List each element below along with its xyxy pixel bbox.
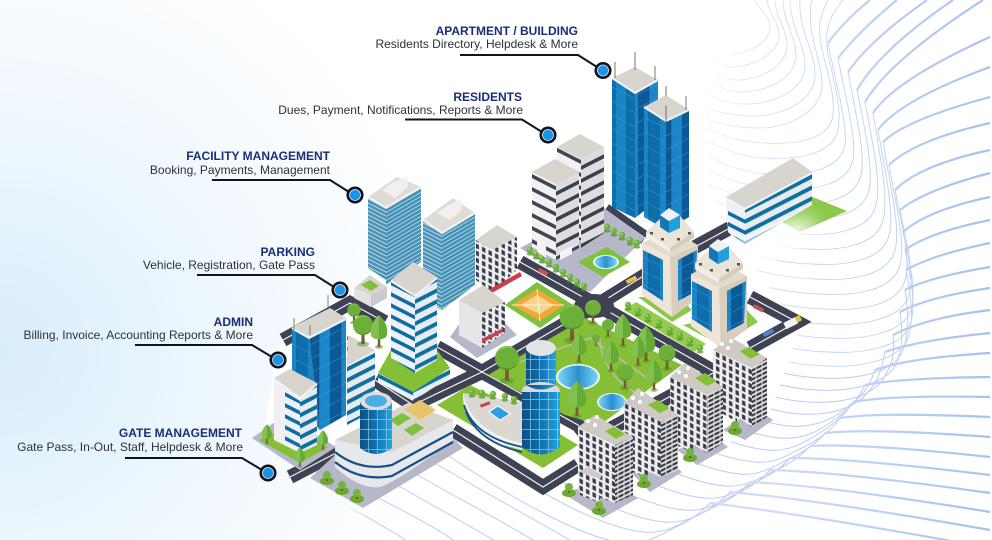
- residential block 1: [562, 415, 638, 518]
- callout: residents: RESIDENTS: [453, 90, 522, 104]
- hedge strip: [624, 302, 706, 354]
- park trees: [495, 300, 676, 418]
- callout: apartment / building: Residents Directory, Helpdesk & More: [375, 37, 578, 51]
- low-rise office building: [310, 400, 463, 508]
- callout: gate management: [17, 426, 275, 480]
- striped tower on podium: [378, 262, 450, 401]
- residential block 4: [713, 337, 773, 440]
- white slab rear: [557, 134, 604, 248]
- lower thin wave lines: [335, 290, 908, 540]
- aqua tower right: [423, 198, 475, 310]
- top vertical wave lines: [702, 0, 913, 366]
- back right slab building: [726, 158, 847, 248]
- thick right portions of waves: [710, 0, 990, 540]
- sports court: [505, 282, 573, 328]
- art deco tower rear plate: [638, 297, 692, 322]
- callout: gate management: GATE MANAGEMENT: [119, 426, 243, 440]
- art deco tower front: [691, 239, 747, 348]
- road network: [283, 210, 797, 487]
- soft fade over slab base: [715, 209, 821, 281]
- central park lawn: [488, 318, 682, 425]
- street trees left: [347, 303, 387, 349]
- art deco tower plate: [683, 308, 758, 345]
- white slab front: [532, 159, 579, 260]
- small white window block: [476, 225, 522, 294]
- cylindrical tower small: [360, 392, 392, 454]
- callout: admin: [24, 315, 285, 367]
- small green roof block: [354, 275, 387, 307]
- city white ground: [262, 130, 800, 518]
- fountain plaza: [520, 205, 645, 292]
- callout: parking: Vehicle, Registration, Gate Pass: [143, 258, 315, 272]
- callout: apartment / building: APARTMENT / BUILDING: [436, 24, 578, 38]
- aqua tower left: [368, 177, 421, 285]
- front lawn: [437, 385, 578, 468]
- art deco tower rear: [642, 208, 698, 317]
- blue glass tower: [292, 295, 346, 430]
- callout: facility management: [150, 149, 362, 202]
- residential block 3: [670, 363, 728, 465]
- vehicles: [538, 268, 802, 337]
- callout: residents: Dues, Payment, Notifications, Reports & More: [278, 103, 523, 117]
- callout: facility management: Booking, Payments, Management: [150, 163, 331, 177]
- callout: residents: [278, 90, 555, 142]
- residential block 2: [624, 388, 682, 492]
- callout: facility management: FACILITY MANAGEMENT: [186, 149, 331, 163]
- roundabout: [574, 294, 614, 318]
- isometric city illustration: [252, 52, 847, 518]
- tall cylindrical tower: [522, 340, 560, 454]
- shrubs by office building: [320, 471, 364, 503]
- striped building on green plate: [252, 369, 336, 470]
- callout: admin: Billing, Invoice, Accounting Reports & More: [24, 328, 253, 342]
- callout: parking: [143, 245, 347, 297]
- twin blue tower B: [644, 86, 689, 230]
- window block with bus: [450, 285, 517, 358]
- callout: parking: PARKING: [261, 245, 315, 259]
- callout: admin: ADMIN: [214, 315, 253, 329]
- twin blue tower A: [612, 52, 658, 218]
- striped block behind: [347, 335, 375, 425]
- callout: gate management: Gate Pass, In-Out, Staff, Helpdesk & More: [17, 440, 243, 454]
- curved terrace building: [463, 389, 522, 452]
- background flowing wave lines: [335, 0, 990, 540]
- callout: apartment / building: [375, 24, 610, 78]
